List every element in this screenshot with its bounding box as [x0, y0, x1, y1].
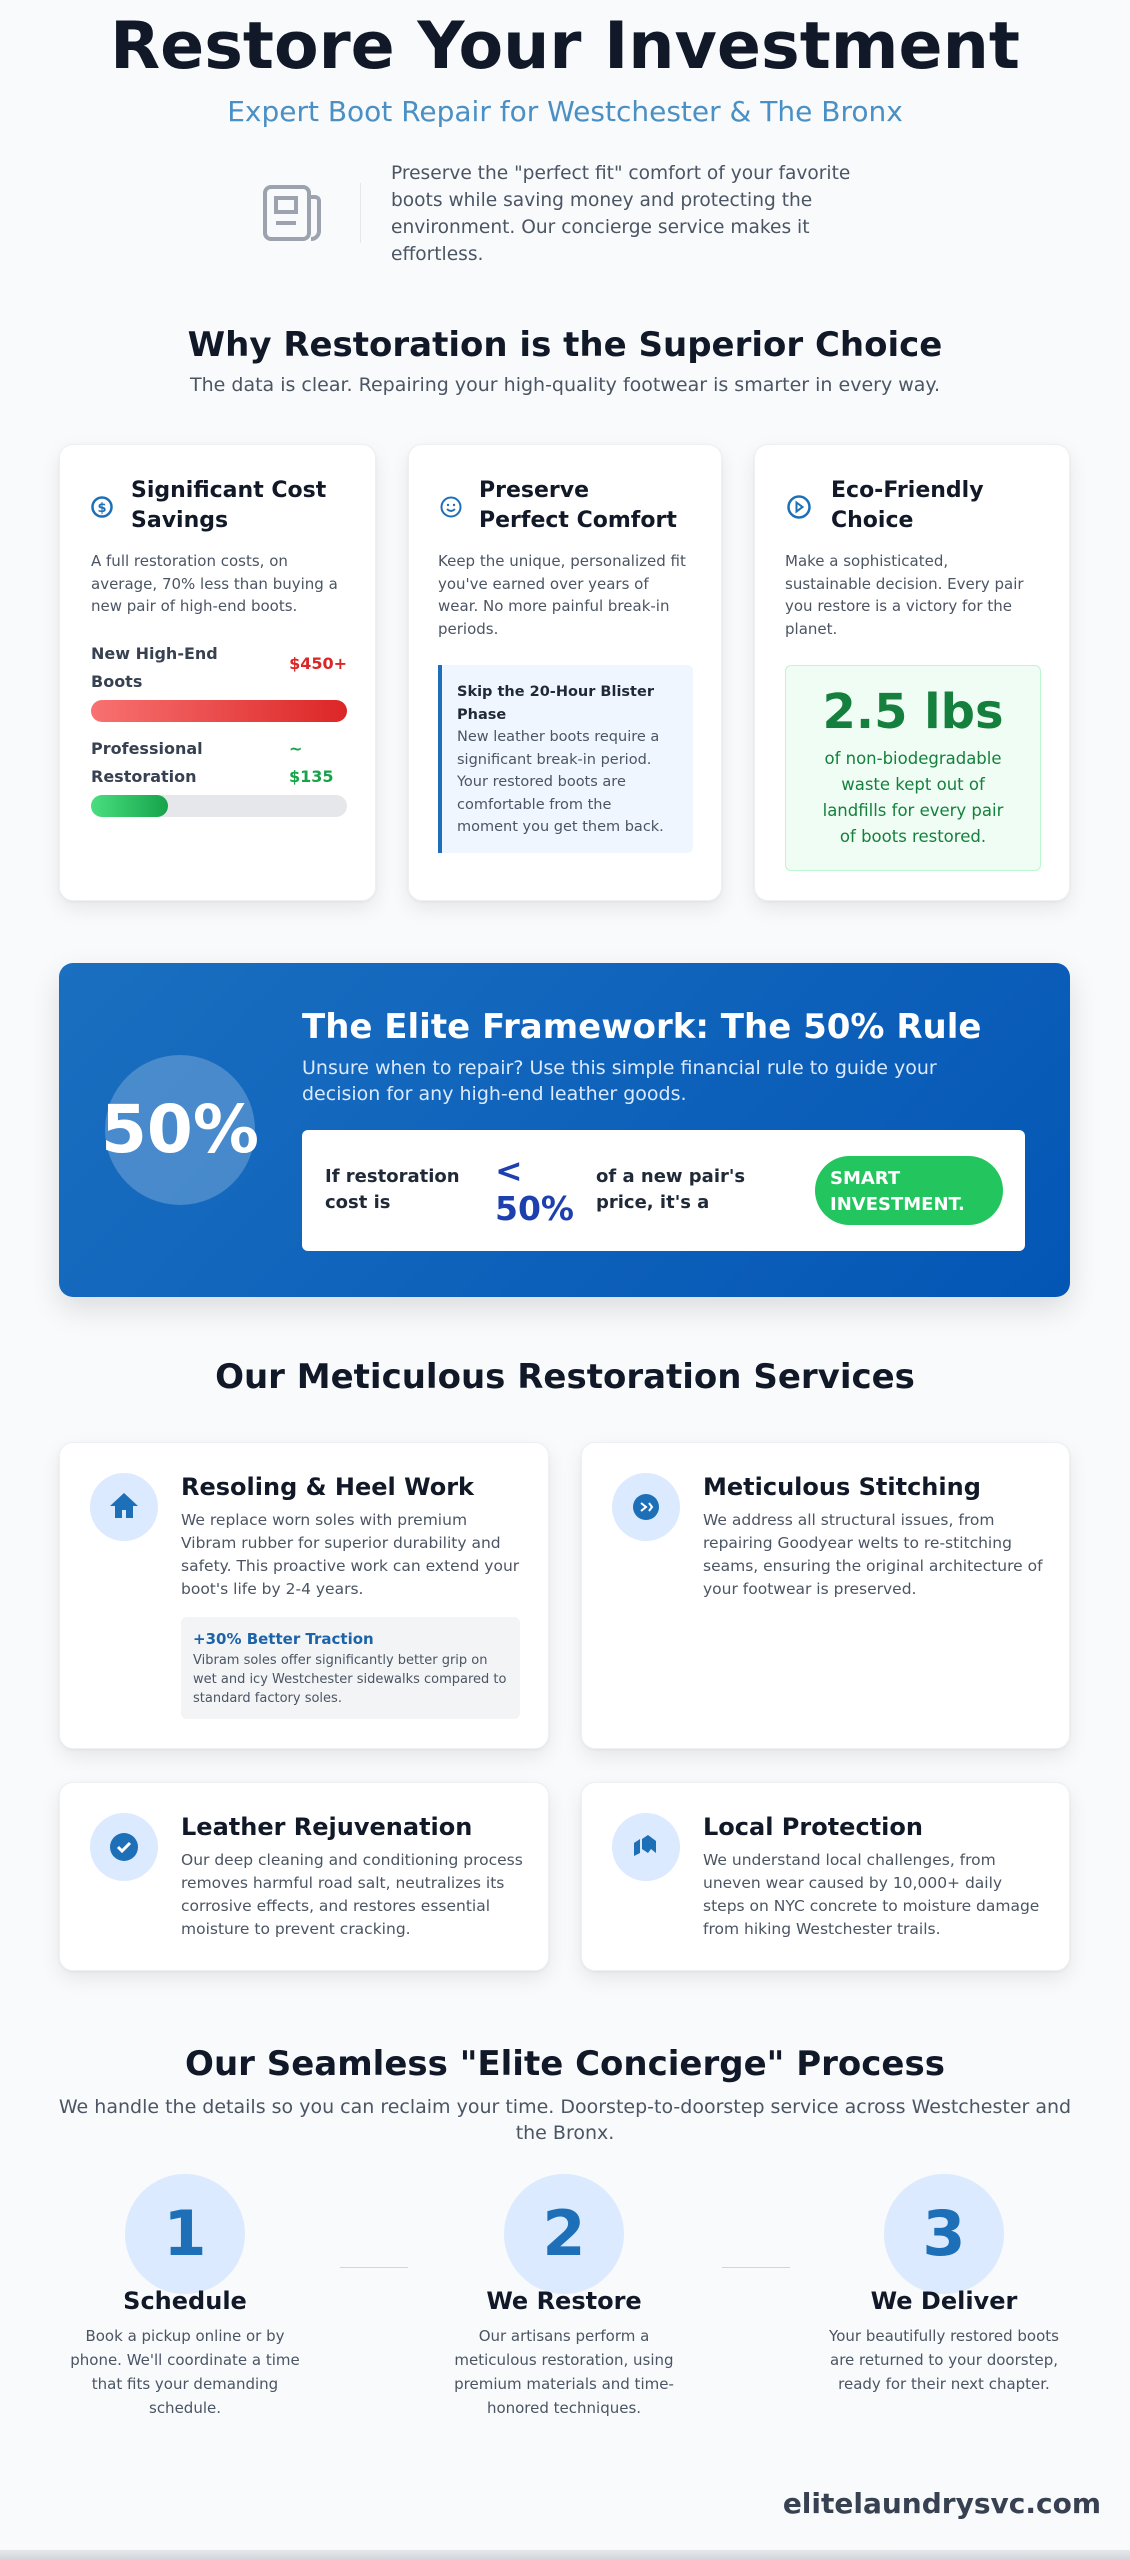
icon: map	[612, 1813, 680, 1881]
subheading: The data is clear. Repairing your high-quality footwear is smarter in every way.	[190, 374, 940, 396]
step title: Schedule	[123, 2287, 247, 2315]
icon: dollar: $	[97, 501, 107, 516]
panel: 50% rule	[59, 963, 1070, 1297]
callout: blister phase	[438, 665, 693, 853]
icon: check	[90, 1813, 158, 1881]
framework subtitle: Unsure when to repair? Use this simple financial rule to guide your decision for any high-end leather goods.	[302, 1057, 937, 1105]
callout: blister phase: Skip the 20-Hour Blister Phase	[457, 684, 654, 722]
step number	[125, 2174, 245, 2294]
panel: leather	[59, 1782, 549, 1971]
callout: traction	[181, 1617, 520, 1719]
rule box	[302, 1130, 1025, 1251]
panel: stitching	[581, 1442, 1070, 1749]
intro text: Preserve the "perfect fit" comfort of your favorite boots while saving money and protecting the environment. Our concierge service makes it effortless.	[391, 163, 850, 265]
framework title: The Elite Framework: The 50% Rule	[302, 1007, 981, 1047]
description: Keep the unique, personalized fit you've earned over years of wear. No more painful break-in periods.	[438, 552, 686, 638]
title: Restore Your Investment	[110, 9, 1020, 84]
pill: smart investment: SMART INVESTMENT.	[830, 1168, 965, 1215]
service text: We replace worn soles with premium Vibram rubber for superior durability and safety. This proactive work can extend your boot's life by 2-4 years.	[181, 1511, 519, 1598]
stat box: 2.5 lbs: of non-biodegradable waste kept out of landfills for every pair of boots restored.	[823, 749, 1003, 846]
step 2	[454, 2174, 674, 2417]
process subtitle: We handle the details so you can reclaim your time. Doorstep-to-doorstep service across Westchester and the Bronx.	[59, 2096, 1071, 2144]
step 1	[70, 2174, 300, 2417]
step text: Our artisans perform a meticulous restoration, using premium materials and time-honored techniques.	[454, 2327, 674, 2417]
card title: Preserve Perfect Comfort	[479, 478, 677, 533]
bar chart: restoration	[91, 739, 347, 817]
panel: resoling	[59, 1442, 549, 1749]
service title: Local Protection	[703, 1813, 923, 1841]
stat box: 2.5 lbs	[785, 665, 1041, 871]
step number: 3	[922, 2197, 966, 2270]
step text: Your beautifully restored boots are returned to your doorstep, ready for their next chapter.	[829, 2327, 1059, 2393]
bar chart: restoration: Professional Restoration	[91, 739, 203, 786]
callout: blister phase: New leather boots require a significant break-in period. Your restored boots are comfortable from the moment you get them back.	[457, 729, 664, 835]
icon: 50% circle	[105, 1055, 255, 1205]
pill: smart investment	[815, 1156, 1003, 1225]
footer: website: elitelaundrysvc.com	[783, 2487, 1101, 2520]
service title: Resoling & Heel Work	[181, 1473, 474, 1501]
heading: process: Our Seamless "Elite Concierge" Process	[185, 2044, 945, 2084]
heading: why restoration: Why Restoration is the Superior Choice	[188, 325, 942, 365]
description: A full restoration costs, on average, 70% less than buying a new pair of high-end boots.	[91, 552, 338, 615]
icon: smile	[440, 496, 462, 518]
panel: eco	[754, 444, 1070, 901]
heading: services: Our Meticulous Restoration Services	[215, 1357, 915, 1397]
panel: cost savings	[59, 444, 376, 901]
step title: We Restore	[486, 2287, 642, 2315]
service title: Leather Rejuvenation	[181, 1813, 472, 1841]
service text: Our deep cleaning and conditioning process removes harmful road salt, neutralizes its corrosive effects, and restores essential moisture to prevent cracking.	[181, 1851, 523, 1938]
icon: newspaper	[263, 185, 321, 241]
step 3	[829, 2174, 1059, 2393]
bar chart: new boots: New High-End Boots	[91, 644, 218, 691]
rule box: If restoration cost is	[325, 1166, 460, 1213]
service text: We address all structural issues, from repairing Goodyear welts to re-stitching seams, ensuring the original architecture of your footwear is preserved.	[703, 1511, 1043, 1598]
panel: comfort	[408, 444, 722, 901]
icon: dollar	[91, 496, 113, 518]
rule box: <	[495, 1151, 523, 1190]
service text: We understand local challenges, from uneven wear caused by 10,000+ daily steps on NYC concrete to moisture damage from hiking Westchester trails.	[703, 1851, 1039, 1938]
card title: Significant Cost Savings	[131, 478, 326, 533]
step number	[884, 2174, 1004, 2294]
bar chart: restoration: ~	[289, 739, 302, 758]
rule box: 50%	[495, 1189, 574, 1228]
icon: stitch	[612, 1473, 680, 1541]
callout: traction: Vibram soles offer significantly better grip on wet and icy Westchester sidewalks compared to standard factory soles.	[193, 1653, 506, 1706]
description: Make a sophisticated, sustainable decision. Every pair you restore is a victory for the planet.	[785, 552, 1024, 638]
rule box: of a new pair's price, it's a	[596, 1166, 745, 1213]
bar chart: new boots: $450+	[289, 654, 347, 673]
step title: We Deliver	[871, 2287, 1017, 2315]
panel: 50% rule: 50%	[101, 1091, 259, 1168]
arrow: connector 2	[722, 2267, 790, 2268]
arrow: connector 1	[340, 2267, 408, 2268]
card title: Eco-Friendly Choice	[831, 478, 984, 533]
callout: traction: +30% Better Traction	[193, 1630, 374, 1648]
step number: 2	[542, 2197, 586, 2270]
subtitle: Expert Boot Repair for Westchester & The Bronx	[227, 95, 903, 128]
stat box: 2.5 lbs: 2.5 lbs	[822, 684, 1004, 740]
step number	[504, 2174, 624, 2294]
step number: 1	[163, 2197, 207, 2270]
icon: play circle	[787, 495, 811, 519]
step text: Book a pickup online or by phone. We'll coordinate a time that fits your demanding schedule.	[70, 2327, 300, 2417]
panel: local protection	[581, 1782, 1070, 1971]
service title: Meticulous Stitching	[703, 1473, 981, 1501]
icon: house	[90, 1473, 158, 1541]
intro block	[263, 163, 850, 265]
bar chart: restoration: $135	[289, 767, 334, 786]
bar chart: new boots	[91, 644, 347, 722]
